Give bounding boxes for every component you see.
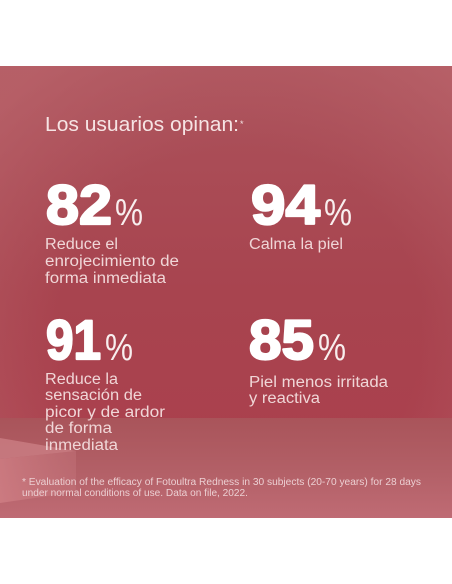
stat: 91%: % xyxy=(105,327,133,369)
footnote: * Evaluation of the efficacy of Fotoultra Redness in 30 subjects (20-70 years) for 28 days xyxy=(22,477,421,488)
stat: 85%: Piel menos irritada xyxy=(249,374,388,391)
stat: 94%: 94 xyxy=(251,173,320,236)
stat: 94% xyxy=(249,173,352,253)
stat: 82% xyxy=(45,173,179,287)
stat: 82%: % xyxy=(115,192,143,234)
footnote: under normal conditions of use. Data on file, 2022. xyxy=(22,488,248,499)
footnote xyxy=(22,477,421,499)
stat: 85%: % xyxy=(318,327,346,369)
panel: background xyxy=(0,66,452,518)
stat: 91%: de forma xyxy=(45,420,112,437)
stat: 94%: % xyxy=(324,192,352,234)
stat: 85%: 85 xyxy=(249,308,314,371)
title: * xyxy=(240,119,244,129)
stat: 91%: 91 xyxy=(46,308,101,371)
stat: 94%: Calma la piel xyxy=(249,236,343,253)
stat: 82%: enrojecimiento de xyxy=(45,253,179,270)
stat: 91%: Reduce la xyxy=(45,371,118,388)
stat: 91% xyxy=(45,308,165,454)
title: Los usuarios opinan: xyxy=(45,114,239,136)
stat: 82%: 82 xyxy=(46,173,112,236)
stat: 85%: y reactiva xyxy=(249,390,320,407)
stat: 82%: forma inmediata xyxy=(45,270,166,287)
stat: 82%: Reduce el xyxy=(45,236,118,253)
stat: 91%: inmediata xyxy=(45,437,118,454)
stat: 91%: sensación de xyxy=(45,387,142,404)
stat: 85% xyxy=(249,308,388,407)
stat: 91%: picor y de ardor xyxy=(45,404,165,421)
